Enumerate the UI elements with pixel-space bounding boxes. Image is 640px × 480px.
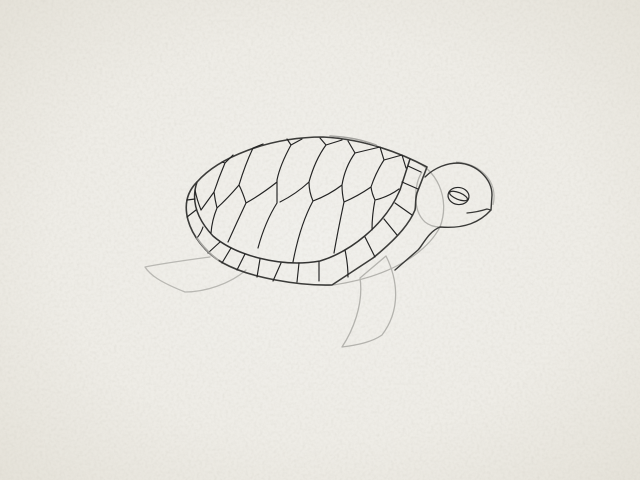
eye [447,186,470,206]
shell outline [186,137,427,285]
front flipper [342,256,396,347]
head guide stroke [456,162,494,205]
marginal dividers [187,166,421,282]
neck guide circle [333,160,444,285]
head and neck outline [395,163,492,270]
inner marginal edge [195,159,410,263]
scute lines [195,138,406,262]
mouth [467,209,491,213]
faint shell highlights [197,136,376,260]
shell [186,136,427,285]
rear flipper [145,257,246,292]
